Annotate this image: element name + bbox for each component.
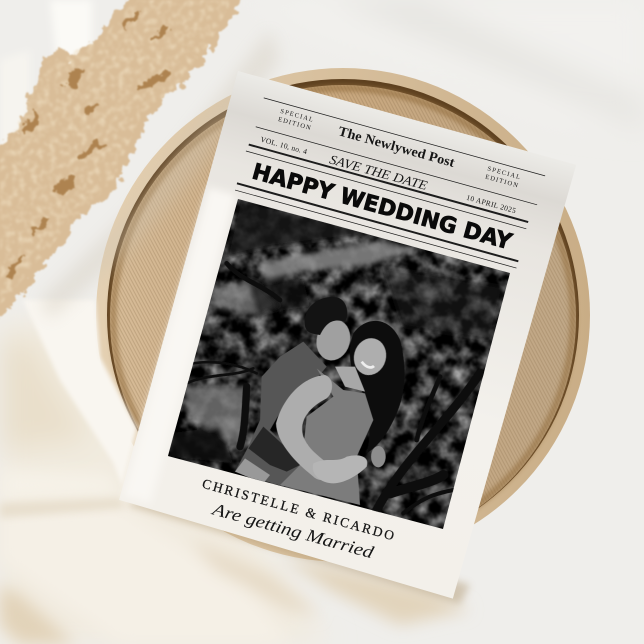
woman arm [276, 375, 333, 480]
side highlight [123, 187, 236, 503]
left edition label: EDITION [277, 116, 313, 132]
plate rim [96, 68, 590, 562]
woman neck [335, 367, 365, 392]
photo base mottled foliage [167, 197, 513, 530]
save the date: SAVE THE DATE [328, 152, 429, 193]
plume body [0, 0, 248, 330]
couple names: CHRISTELLE & RICARDO [201, 476, 397, 544]
couple photo [167, 197, 513, 530]
plume shadow [40, 30, 280, 320]
paper shadow [128, 490, 470, 604]
photo tree branches [187, 263, 480, 513]
man hair [305, 297, 347, 335]
right edition label: EDITION [484, 174, 520, 190]
man hand [371, 446, 386, 467]
right edition label [484, 165, 522, 190]
man [235, 297, 355, 487]
masthead rules [235, 97, 545, 269]
paper sheet [117, 71, 576, 599]
woman smile [362, 362, 374, 367]
tagline: Are getting Married [209, 498, 376, 562]
right edition label: SPECIAL [487, 165, 522, 181]
pampas grass [0, 0, 280, 330]
left edition label [277, 108, 315, 132]
date: 10 APRIL 2025 [465, 193, 517, 215]
photo tonal areas [170, 200, 503, 463]
headline: HAPPY WEDDING DAY [249, 160, 515, 256]
newspaper name: The Newlywed Post [337, 123, 457, 170]
volume: VOL. 10, no. 4 [259, 135, 308, 156]
left edition label: SPECIAL [279, 108, 315, 124]
man neck and face [316, 320, 351, 361]
man torso [235, 342, 327, 487]
woman [276, 321, 405, 505]
dish groove shade [113, 88, 573, 548]
woman dress [280, 368, 373, 505]
plate dish [107, 79, 579, 551]
wooden plate [96, 68, 590, 562]
newspaper card [117, 71, 576, 599]
fabric fold over plate [23, 300, 137, 485]
man waist light [235, 458, 270, 483]
woman hair [350, 321, 405, 453]
woman face [353, 338, 386, 376]
man forearm [248, 427, 303, 472]
hands [321, 455, 368, 484]
plume brown tufts [4, 8, 173, 280]
plume speckles [0, 0, 232, 305]
